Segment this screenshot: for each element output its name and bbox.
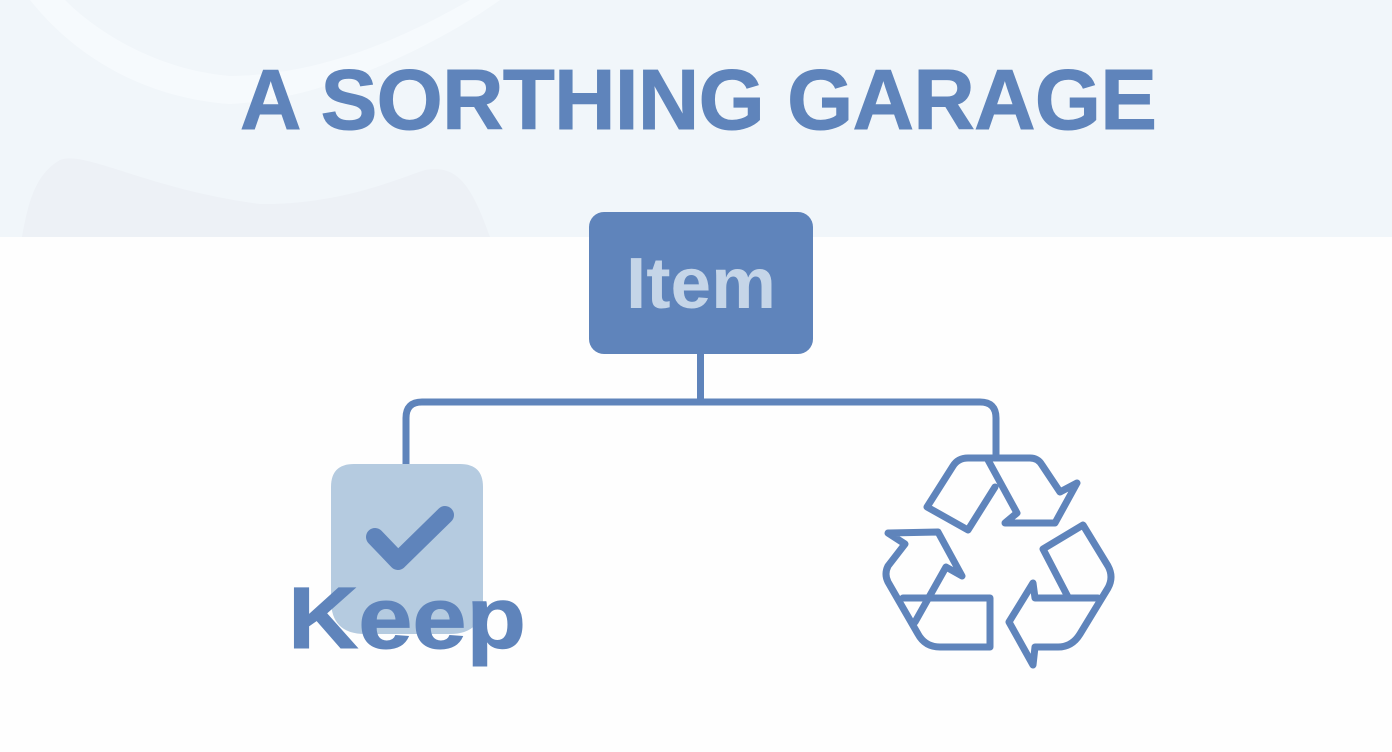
keep box bbox=[331, 464, 483, 634]
connector lines bbox=[406, 352, 996, 465]
header band bbox=[0, 0, 1392, 237]
item box bbox=[589, 212, 813, 354]
left arrow bbox=[886, 532, 990, 647]
right arrow bbox=[1009, 525, 1111, 665]
keep label: Keep bbox=[288, 570, 526, 667]
icon: check mark bbox=[375, 515, 445, 561]
icon: recycling symbol bbox=[886, 458, 1111, 665]
title: A SORTHING GARAGE bbox=[240, 53, 1157, 148]
keep option bbox=[288, 464, 526, 667]
item label: Item bbox=[626, 244, 776, 324]
top arrow bbox=[927, 458, 1077, 530]
